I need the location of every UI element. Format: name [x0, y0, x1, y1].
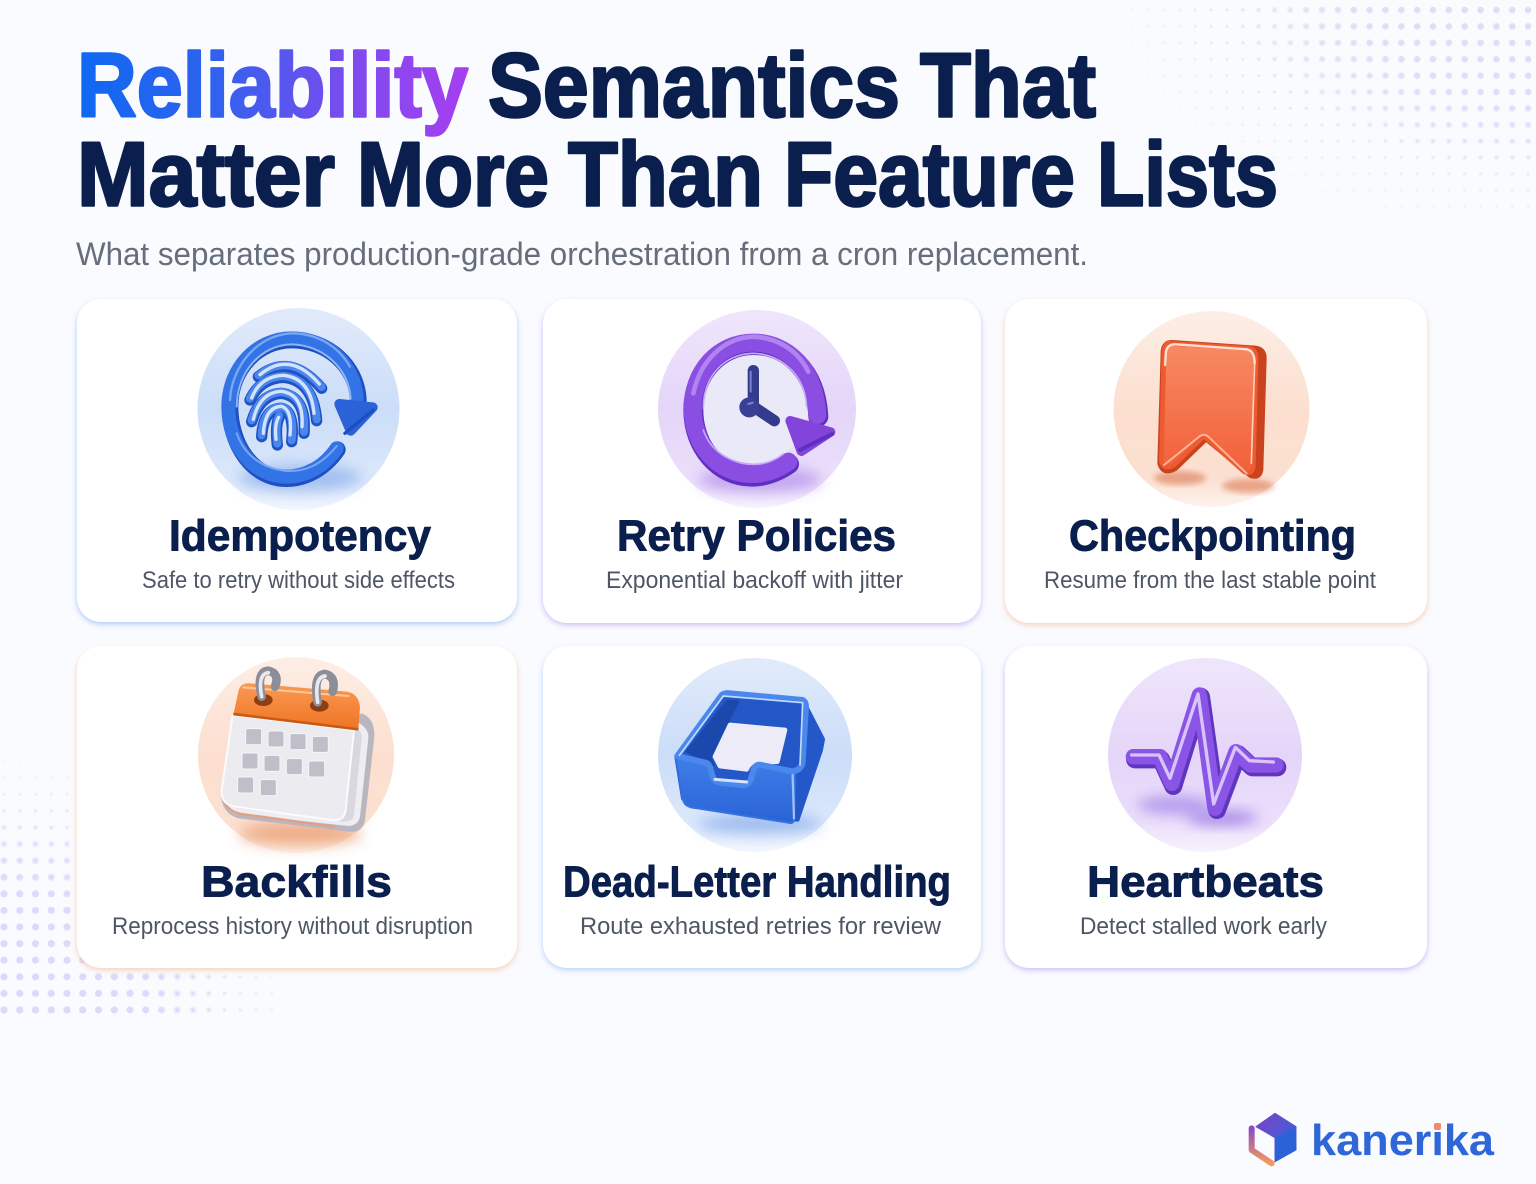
card description: Detect stalled work early: [1080, 913, 1327, 940]
dot pattern: top right: [1162, 6, 1532, 208]
card title: Checkpointing: [1069, 512, 1356, 560]
card title: Idempotency: [169, 512, 432, 560]
title line 2: [77, 124, 1278, 226]
dot pattern: bottom left: [0, 776, 272, 1014]
logo: kanerika: [1252, 1113, 1495, 1165]
icon: clock with retry arrow: [657, 309, 857, 509]
title: [77, 36, 1278, 226]
card title: Backfills: [201, 858, 392, 906]
subtitle: What separates production-grade orchestration from a cron replacement.: [76, 236, 1088, 272]
title line 1 remainder: Semantics: [488, 36, 900, 136]
title line 2: Than: [568, 124, 763, 226]
card description: Safe to retry without side effects: [142, 567, 455, 594]
title line 2: More: [357, 124, 549, 226]
title line 2: Matter: [77, 124, 335, 226]
icon: bookmark: [1112, 310, 1310, 508]
card description: Resume from the last stable point: [1044, 567, 1376, 594]
card title: Retry Policies: [617, 512, 896, 560]
icon: fingerprint with retry arrow: [196, 307, 400, 511]
panel: Checkpointing: [1005, 299, 1427, 625]
card title: Heartbeats: [1087, 858, 1324, 906]
panel: Dead-Letter Handling: [543, 646, 981, 970]
panel: Backfills: [77, 646, 517, 970]
title word: Reliability: Reliability: [77, 36, 468, 136]
panel: Idempotency: [77, 299, 517, 624]
card description: Route exhausted retries for review: [580, 913, 942, 940]
icon: inbox tray: [657, 657, 853, 853]
icon: heartbeat pulse: [1107, 657, 1303, 853]
title line 1 remainder: That: [920, 36, 1096, 136]
card title: Dead-Letter Handling: [563, 858, 951, 906]
title line 2: Lists: [1097, 124, 1278, 226]
card description: Exponential backoff with jitter: [606, 567, 903, 594]
card description: Reprocess history without disruption: [112, 913, 473, 940]
icon: logo cube: [1252, 1113, 1296, 1163]
wordmark: kanerika: [1311, 1116, 1495, 1165]
wordmark dot: [1434, 1123, 1441, 1130]
panel: Retry Policies: [543, 299, 981, 625]
icon: calendar: [197, 656, 395, 854]
panel: Heartbeats: [1005, 646, 1427, 970]
title line 2: Feature: [784, 124, 1075, 226]
